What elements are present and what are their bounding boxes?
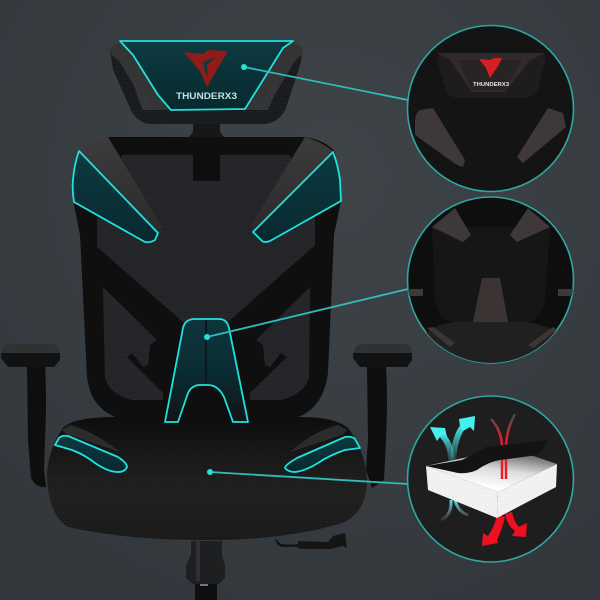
zoomed backrest [432,227,550,324]
lower cyan airflow [441,500,468,520]
circle: lumbar detail [408,197,574,365]
chair [1,41,412,600]
seat [47,417,367,540]
zoomed shoulders [432,208,471,242]
zoomed shoulder left [415,108,465,167]
lower right mesh [250,287,310,400]
zoomed armrests [408,289,423,296]
logo emblem [183,50,228,87]
lumbar support panel [165,319,248,422]
callout line: lumbar [204,289,408,340]
callout line: headrest [241,64,408,100]
foam block [426,456,557,518]
callout line: seat [207,469,408,484]
zoomed headrest [437,53,546,98]
zoomed seat accents [427,327,455,347]
zoomed logo [479,58,502,78]
zoomed wordmark: THUNDERX3 [473,82,509,88]
upper cyan arrows [430,416,475,462]
gas lift column [186,541,225,600]
logo wordmark: THUNDERX3 [176,91,237,101]
seat side panel right [285,437,360,472]
upper mesh [97,155,315,322]
zoomed seat [426,322,556,363]
shoulder panel left [73,151,158,242]
headrest stem [189,122,224,137]
shoulder panel right [253,152,341,242]
zoomed shoulder right [517,108,566,163]
shoulder band left [79,137,162,233]
headrest [110,41,302,124]
black cover sheet [426,440,547,473]
tilt lever [275,533,347,549]
zoomed lumbar [473,278,508,322]
circle: breathable foam [408,396,574,562]
left armrest [1,344,60,487]
lumbar shadow block [193,153,220,181]
lower left mesh [103,287,163,400]
lower red arrows [482,512,527,546]
seat side panel left [55,436,127,472]
backrest frame [73,137,341,421]
right armrest [353,344,412,488]
upper red lines [491,414,515,479]
circle: headrest and shoulder detail [408,26,574,192]
shoulder band right [250,137,333,232]
headrest teal panel [120,41,293,110]
